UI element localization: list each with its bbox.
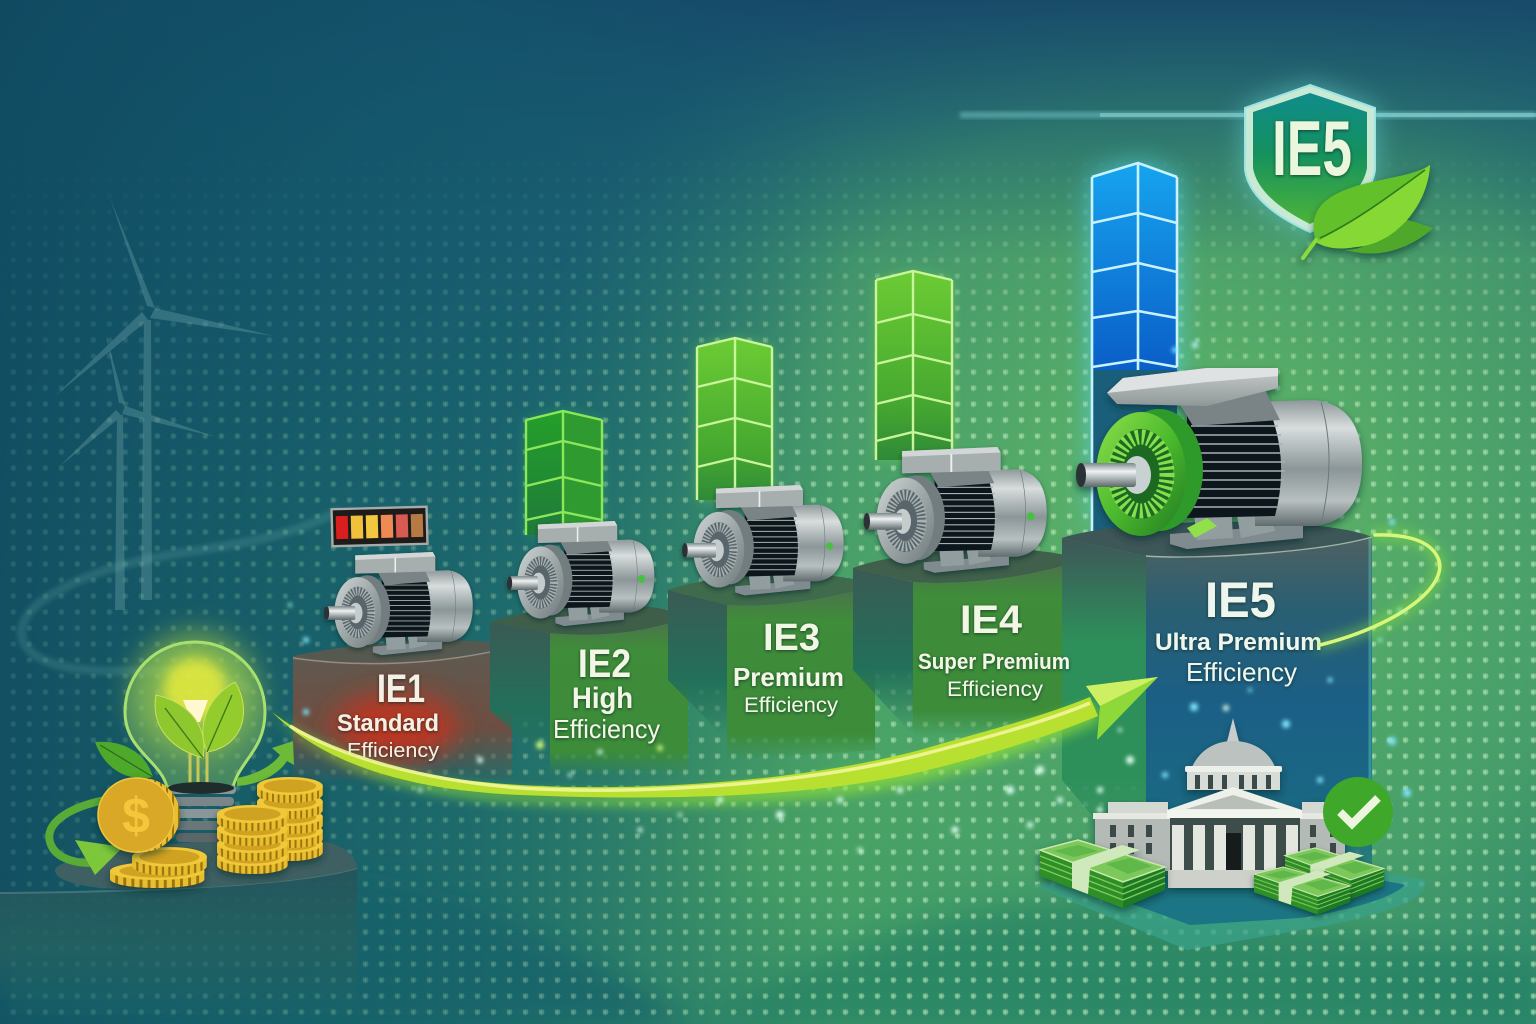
icon: government building bbox=[1093, 718, 1347, 888]
pillar: IE4 bbox=[853, 549, 1082, 737]
pillar: IE1 bbox=[293, 640, 512, 780]
label: IE3 Premium Efficiency: Efficiency bbox=[744, 694, 839, 717]
label: IE2 High Efficiency: IE2 bbox=[578, 642, 631, 686]
efficiency bar: IE3 bbox=[697, 338, 772, 500]
pillar: IE2 bbox=[490, 604, 688, 775]
label: IE4 Super Premium Efficiency: Super Premium bbox=[918, 649, 1070, 674]
platform: left bbox=[0, 838, 357, 1010]
label: IE2 High Efficiency bbox=[553, 642, 660, 744]
icon: check badge bbox=[1323, 777, 1393, 847]
label: IE4 Super Premium Efficiency: Efficiency bbox=[947, 678, 1044, 701]
icon: dollar coin bbox=[98, 778, 180, 852]
label: IE3 Premium Efficiency: Premium bbox=[733, 662, 844, 692]
icon: leaf shield IE5 bbox=[1245, 85, 1433, 258]
icon: money stack left bbox=[1040, 840, 1165, 908]
icon: money stack right rear bbox=[1285, 848, 1384, 900]
icon: leaf shield IE5: IE5 bbox=[1272, 104, 1352, 192]
label: IE5 Ultra Premium Efficiency: Efficiency bbox=[1186, 657, 1297, 687]
motor: IE4 bbox=[864, 447, 1047, 573]
icon: gold coins bbox=[110, 777, 323, 888]
arrow: rising efficiency swoosh bbox=[272, 677, 1158, 805]
label: IE1 Standard Efficiency: IE1 bbox=[377, 667, 425, 711]
motor: IE1 bbox=[324, 552, 473, 655]
label: IE2 High Efficiency: High bbox=[572, 682, 633, 715]
pillar: IE3 bbox=[668, 574, 875, 760]
motor: IE5 green bbox=[1076, 368, 1362, 549]
label: IE1 Standard Efficiency bbox=[337, 667, 439, 762]
efficiency bar: IE2 bbox=[526, 411, 602, 535]
label: IE2 High Efficiency: Efficiency bbox=[553, 714, 660, 744]
horizontal light line bbox=[960, 112, 1536, 118]
sparkles bbox=[288, 342, 1411, 852]
label: IE5 Ultra Premium Efficiency: IE5 bbox=[1205, 572, 1276, 628]
icon: light bulb with leaves bbox=[95, 633, 294, 842]
label: IE1 Standard Efficiency: Efficiency bbox=[347, 740, 439, 762]
label: IE5 Ultra Premium Efficiency bbox=[1155, 572, 1322, 687]
label: IE3 Premium Efficiency: IE3 bbox=[763, 617, 820, 659]
winding road bbox=[21, 510, 340, 690]
efficiency bar: IE4 bbox=[876, 271, 952, 460]
pillar: IE5 bbox=[1062, 522, 1372, 900]
motor: IE3 bbox=[682, 485, 844, 595]
arrow: savings up bbox=[237, 741, 294, 786]
label: IE5 Ultra Premium Efficiency: Ultra Premium bbox=[1155, 629, 1322, 656]
label: IE4 Super Premium Efficiency bbox=[918, 598, 1070, 701]
platform: pad under building bbox=[1033, 869, 1425, 950]
label: IE3 Premium Efficiency bbox=[733, 617, 844, 717]
leaves bbox=[1303, 165, 1433, 258]
icon: wind turbines bbox=[55, 198, 274, 610]
arrow: swoosh around IE5 pillar bbox=[1320, 535, 1440, 645]
efficiency bar: IE5 bbox=[1092, 163, 1177, 535]
icon: dollar coin: $ bbox=[122, 788, 150, 844]
icon: money stack right front bbox=[1254, 867, 1350, 915]
motor: IE2 bbox=[507, 521, 654, 626]
label: IE4 Super Premium Efficiency: IE4 bbox=[960, 598, 1023, 642]
label: IE1 Standard Efficiency: Standard bbox=[337, 710, 439, 737]
gauge: IE1 low efficiency bbox=[332, 507, 427, 546]
arrow: loop around dollar coin bbox=[49, 800, 123, 875]
